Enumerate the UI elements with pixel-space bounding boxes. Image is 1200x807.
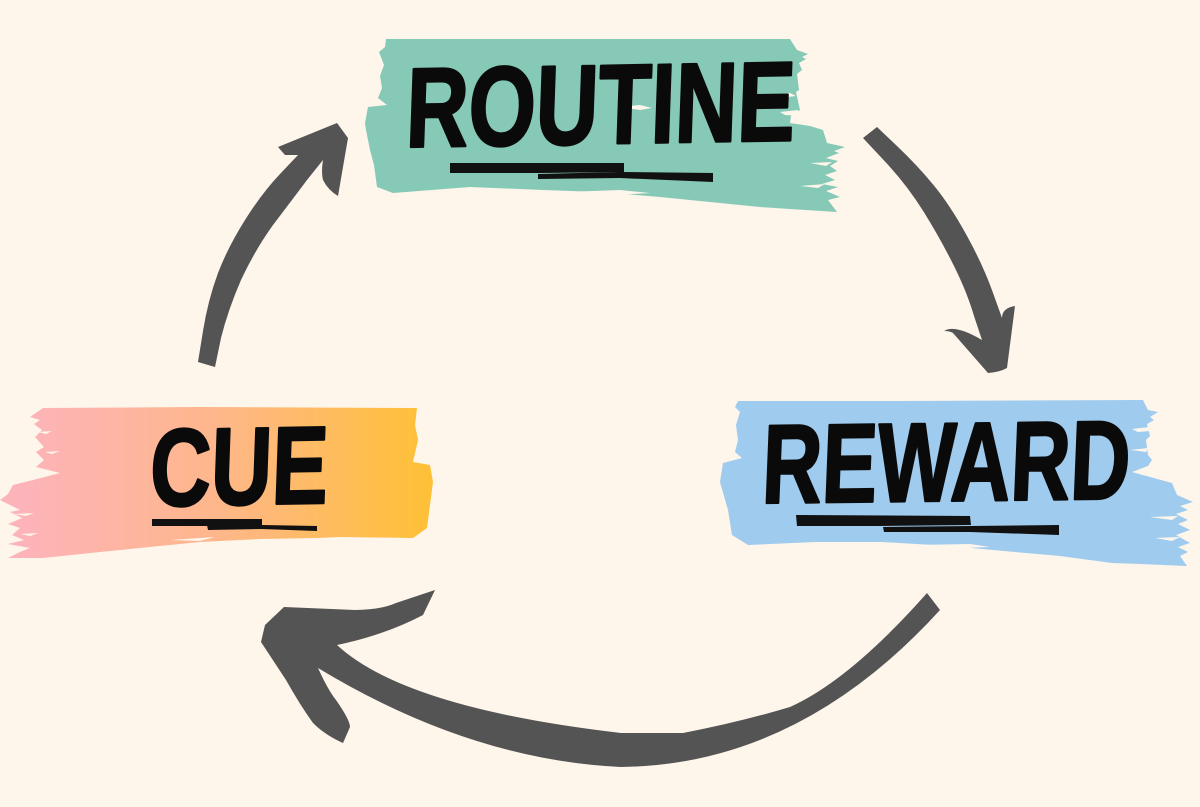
- label: routine: ROUTINE: [404, 38, 798, 171]
- streaks in reward brush stroke: [915, 427, 1180, 549]
- arrow: routine to reward: [863, 127, 1015, 373]
- brush stroke: cue: [0, 407, 433, 558]
- streaks in cue brush stroke: [14, 431, 215, 541]
- label: cue: CUE: [148, 404, 330, 530]
- arrow: reward to cue: [261, 590, 940, 767]
- underline: reward: [796, 515, 1059, 535]
- brush stroke: reward: [720, 400, 1193, 566]
- panel: routine: [365, 38, 845, 212]
- brush stroke: routine: [365, 39, 845, 212]
- arrow: cue to routine: [198, 123, 348, 367]
- streaks in routine brush stroke: [565, 93, 832, 196]
- panel: reward: [720, 398, 1193, 566]
- panel: cue: [0, 404, 433, 558]
- underline: cue: [152, 519, 317, 531]
- underline: routine: [450, 163, 713, 182]
